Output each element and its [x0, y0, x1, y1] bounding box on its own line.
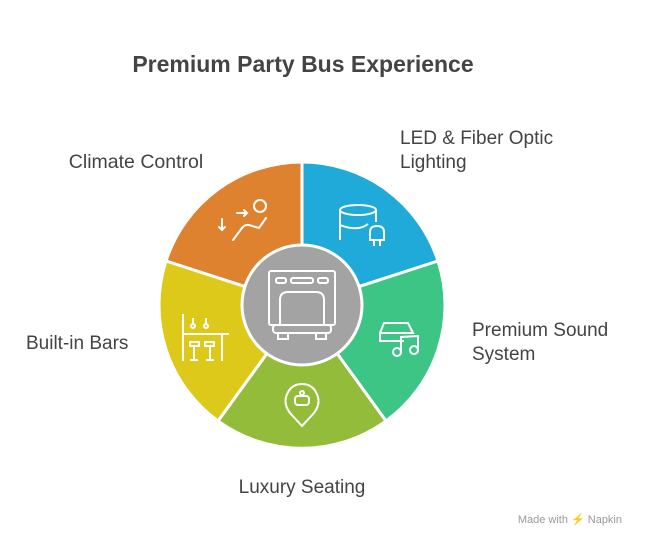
icon: LED fiber: [340, 205, 384, 246]
segment: built-in bars: [159, 261, 302, 421]
label: sound: Premium Sound: [472, 320, 608, 341]
segment: climate control: [166, 162, 302, 305]
center circle: [242, 245, 362, 365]
segment: sound system: [302, 261, 445, 421]
icon: climate: [219, 200, 266, 240]
label: LED lighting: LED & Fiber Optic: [400, 128, 553, 149]
icon: bars: [183, 314, 229, 361]
icon: bus: [269, 271, 335, 339]
title: Premium Party Bus Experience: [132, 51, 474, 77]
icon: car music: [380, 323, 418, 356]
segment: luxury seating: [218, 305, 386, 448]
label: seating: Luxury Seating: [239, 477, 365, 498]
wheel chart: [159, 162, 445, 448]
segment: LED lighting: [302, 162, 438, 305]
icon: seating pin: [286, 384, 318, 426]
label: LED lighting: Lighting: [400, 152, 467, 173]
watermark: Made with ⚡ Napkin: [518, 513, 622, 526]
label: climate control: Climate Control: [69, 151, 203, 173]
label: bars: Built-in Bars: [26, 333, 128, 354]
label: sound: System: [472, 344, 535, 365]
